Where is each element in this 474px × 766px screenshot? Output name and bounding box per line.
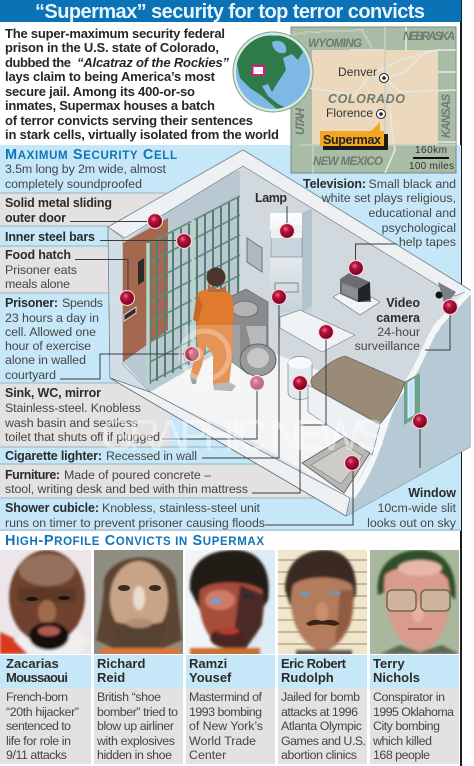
convict: Richard Reid: hidden in shoe <box>97 748 172 762</box>
label: furniture: stool, writing desk and bed with thin mattress <box>5 482 248 496</box>
convict: Eric Robert Rudolph: attacks at 1996 <box>281 705 358 719</box>
map: Supermax callout: Supermax <box>323 133 381 147</box>
convict: Terry Nichols: which killed <box>372 734 432 748</box>
label: prisoner: Prisoner: <box>5 296 58 310</box>
cell: outer door <box>123 218 168 362</box>
label: television: white set plays religious, <box>321 191 456 205</box>
label: food hatch: Prisoner eats <box>5 263 77 277</box>
label: cigarette lighter: Cigarette lighter: <box>5 449 102 463</box>
marker: desk <box>318 324 334 340</box>
label: prisoner: 23 hours a day in <box>5 311 99 325</box>
cell: shower tray <box>302 437 370 493</box>
cell: toilet <box>240 344 276 376</box>
leader lines <box>60 206 450 525</box>
cell: concrete stool <box>288 356 312 400</box>
convict: Richard Reid <box>94 550 183 764</box>
convict: Richard Reid: bomber” tried to <box>97 705 178 719</box>
map: KANSAS <box>441 94 453 138</box>
label: window: looks out on sky <box>367 516 457 530</box>
convict: Zacarias Moussaoui: life for role in <box>6 734 71 748</box>
map: NEBRASKA <box>403 31 455 43</box>
cell: bed base <box>308 385 380 455</box>
label: video camera: surveillance <box>355 339 420 353</box>
photo: Reid <box>94 550 183 654</box>
cell: lamp column <box>270 208 312 312</box>
map: scale bar <box>409 145 454 172</box>
marker: window <box>412 413 428 429</box>
right frame line <box>460 0 462 766</box>
label: television: Small black and <box>369 177 456 191</box>
marker: prisoner <box>184 346 200 362</box>
intro text: inmates, Supermax houses a batch <box>5 98 215 113</box>
cell: top cap <box>108 150 470 296</box>
map: state labels: WYOMING <box>308 38 362 50</box>
convict: Richard Reid: British “shoe <box>97 690 161 704</box>
convict: Zacarias Moussaoui: sentenced to <box>6 719 71 733</box>
cell: outer right wall <box>346 290 470 516</box>
convict: Zacarias Moussaoui: Moussaoui <box>6 670 68 685</box>
cell: sink <box>230 289 268 374</box>
convict: Eric Robert Rudolph: Rudolph <box>281 670 334 685</box>
intro text: The super-maximum security federal <box>5 26 225 41</box>
label: window: Window <box>408 486 456 500</box>
label: video camera: 24-hour <box>377 325 420 339</box>
convict: Zacarias Moussaoui <box>0 550 91 764</box>
marker: food hatch <box>119 290 135 306</box>
convict: Terry Nichols: Terry <box>373 656 405 671</box>
convict: Eric Robert Rudolph: abortion clinics <box>281 748 357 762</box>
cell: food hatch <box>124 307 136 321</box>
label: prisoner: cell. Allowed one <box>5 325 96 339</box>
cell dimensions text: completely soundproofed <box>5 177 142 191</box>
map: borders and roads <box>291 27 456 173</box>
convict: Zacarias Moussaoui: Zacarias <box>6 656 59 671</box>
label: television: help tapes <box>399 235 456 249</box>
watermark <box>100 325 385 460</box>
intro text: dubbed the <box>5 55 71 70</box>
map: Denver: Denver <box>338 65 377 79</box>
map <box>291 27 456 173</box>
marker: sink <box>249 375 265 391</box>
cell: inner steel bars <box>148 196 240 386</box>
intro text: lays claim to being America’s most <box>5 69 216 84</box>
convict: Ramzi Yousef: Center <box>189 748 226 762</box>
label: sink, WC, mirror: toilet that shuts off if plugged <box>5 430 160 444</box>
convict: Terry Nichols: 168 people <box>373 748 430 762</box>
map: scale bar: 100 miles <box>409 161 454 172</box>
marker: shower <box>344 455 360 471</box>
photo: Rudolph <box>278 550 367 654</box>
label: television <box>303 177 456 249</box>
cell: bed mattress <box>311 356 405 424</box>
map: COLORADO <box>328 92 405 106</box>
cell: outer block <box>108 150 470 516</box>
label: shower cubicle: Knobless, stainless-steel unit <box>102 501 261 515</box>
marker: stool <box>292 375 308 391</box>
intro text: “Alcatraz of the Rockies” <box>77 55 230 70</box>
cell: left jamb <box>108 227 150 398</box>
convict: Zacarias Moussaoui: French-born <box>6 690 68 704</box>
cell: back-left wall <box>123 170 240 392</box>
photo: Moussaoui <box>0 550 91 654</box>
convict: Terry Nichols: Conspirator in <box>373 690 445 704</box>
cell: video camera <box>436 282 456 306</box>
label: solid metal door: outer door <box>5 211 66 225</box>
photo: Nichols <box>370 550 459 654</box>
label: food hatch: Food hatch <box>5 248 71 262</box>
cell: door window <box>138 258 144 285</box>
text bands <box>0 193 461 530</box>
cell dimensions text: 3.5m long by 2m wide, almost <box>5 162 167 176</box>
map: Colorado state <box>312 50 438 145</box>
convict: Ramzi Yousef: Mastermind of <box>189 690 263 704</box>
marker: cigarette lighter <box>271 289 287 305</box>
cell: window slit <box>404 373 420 425</box>
label: television: psychological <box>382 221 456 235</box>
label: video camera: camera <box>376 311 421 325</box>
convict: Zacarias Moussaoui: 9/11 attacks <box>6 748 67 762</box>
label: sink, WC, mirror: Sink, WC, mirror <box>5 386 101 400</box>
map: Florence: Florence <box>326 106 373 120</box>
label: solid metal door: Solid metal sliding <box>5 196 112 210</box>
cell: prisoner <box>190 268 236 391</box>
marker: lamp <box>279 223 295 239</box>
convict: Richard Reid: Reid <box>97 670 125 685</box>
label: sink, WC, mirror: Stainless-steel. Knobless <box>5 401 141 415</box>
marker: solid door <box>147 213 163 229</box>
intro text: in stark cells, virtually isolated from the world <box>5 127 279 142</box>
convict: Eric Robert Rudolph: Games and U.S. <box>281 734 366 748</box>
cell: floor <box>150 340 392 498</box>
heading: high-profile convicts: HIGH-PROFILE CONVICTS IN SUPERMAX <box>5 533 264 549</box>
intro text: secure jail. Among its 400-or-so <box>5 84 195 99</box>
locator globe <box>233 32 313 112</box>
convict: Eric Robert Rudolph <box>278 550 367 764</box>
convict: Terry Nichols: 1995 Oklahoma <box>373 705 454 719</box>
convict: Eric Robert Rudolph: Atlanta Olympic <box>281 719 362 733</box>
convict: Richard Reid: with explosives <box>96 734 175 748</box>
cell: mirror <box>247 238 262 272</box>
convict: Eric Robert Rudolph: Eric Robert <box>281 656 347 671</box>
heading: maximum security cell: MAXIMUM SECURITY CELL <box>5 147 177 163</box>
convict: Richard Reid: Richard <box>97 656 145 671</box>
cell: front floor edge <box>110 378 350 516</box>
intro text: prison in the U.S. state of Colorado, <box>5 40 219 55</box>
cell cutaway illustration <box>108 150 470 516</box>
map: Denver <box>338 65 388 82</box>
convict: Ramzi Yousef: 1993 bombing <box>189 705 262 719</box>
label: window: 10cm-wide slit <box>378 501 457 515</box>
cell: curved wall edge <box>352 291 470 497</box>
map: scale bar: 160km <box>415 145 447 156</box>
label: inner steel bars: Inner steel bars <box>5 230 95 244</box>
label: furniture: Furniture: <box>5 468 60 482</box>
label: prisoner: courtyard <box>5 368 56 382</box>
label: television: educational and <box>368 206 456 220</box>
convict: Ramzi Yousef: Ramzi <box>189 656 227 671</box>
label: lamp: Lamp <box>255 191 287 205</box>
marker: camera <box>442 299 458 315</box>
cell: desk <box>280 310 355 352</box>
watermark: GRAPHIC NEWS <box>100 411 385 460</box>
convict: Eric Robert Rudolph: Jailed for bomb <box>281 690 360 704</box>
label: prisoner: hour of exercise <box>5 339 91 353</box>
photo: Yousef <box>185 550 275 654</box>
label: video camera: Video <box>386 296 420 310</box>
cell: television <box>333 273 380 315</box>
label: cigarette lighter: Recessed in wall <box>106 449 197 463</box>
cell: right wall <box>240 165 455 408</box>
convict: Ramzi Yousef: World Trade <box>189 734 256 748</box>
convict: Terry Nichols: Nichols <box>373 670 420 685</box>
label: shower cubicle: runs on timer to prevent prisoner causing floods <box>5 516 265 530</box>
map: NEW MEXICO <box>313 156 383 168</box>
convict: Ramzi Yousef: of New York’s <box>189 719 263 733</box>
label: food hatch: meals alone <box>5 277 70 291</box>
map: UTAH <box>295 107 307 135</box>
intro text: of terror convicts serving their sentences <box>5 113 253 128</box>
section background: cell <box>0 145 461 531</box>
convict: Ramzi Yousef: Yousef <box>189 670 232 685</box>
convict: Richard Reid: blow up airliner <box>97 719 174 733</box>
title banner: “Supermax” security for top terror convicts <box>35 1 425 23</box>
label: television: Television: <box>303 177 366 191</box>
label: sink, WC, mirror: wash basin and seatless <box>4 416 138 430</box>
label: prisoner: Spends <box>62 296 103 310</box>
convict: Terry Nichols <box>370 550 459 764</box>
convict: Terry Nichols: City bombing <box>373 719 440 733</box>
convict: Ramzi Yousef <box>185 550 275 764</box>
marker: inner bars <box>176 233 192 249</box>
label: prisoner: alone in walled <box>5 353 86 367</box>
convict: Zacarias Moussaoui: “20th hijacker” <box>6 705 79 719</box>
label: shower cubicle: Shower cubicle: <box>5 501 99 515</box>
camera leader diagonal <box>437 308 450 332</box>
marker: television <box>348 260 364 276</box>
label: furniture: Made of poured concrete – <box>64 468 211 482</box>
map: Supermax callout <box>320 122 388 150</box>
